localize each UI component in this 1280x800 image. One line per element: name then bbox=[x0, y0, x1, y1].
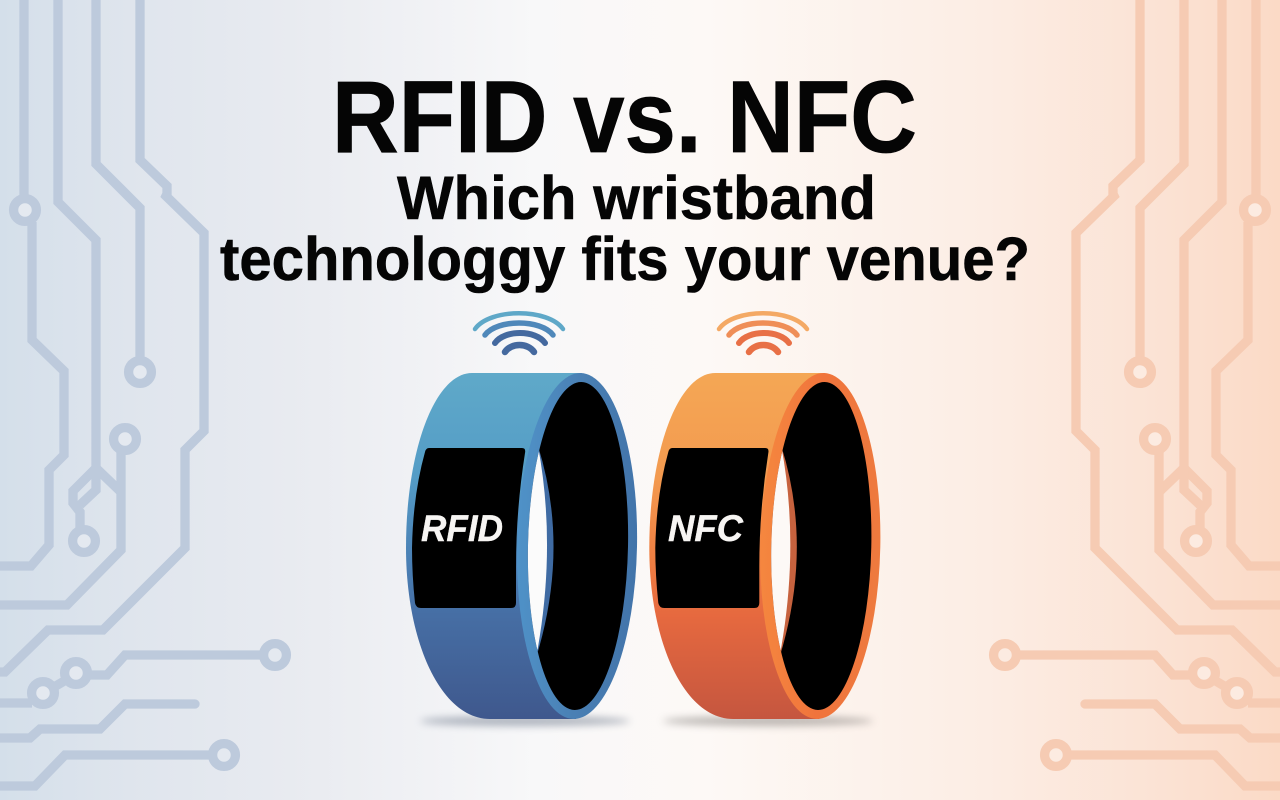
RFID band body bbox=[406, 373, 582, 719]
title: RFID vs. NFC bbox=[332, 60, 917, 174]
icon: NFC signal waves bbox=[719, 313, 807, 352]
RFID label: RFID bbox=[421, 508, 503, 549]
RFID black panel bbox=[412, 448, 525, 608]
right circuit pattern bbox=[994, 0, 1280, 786]
subtitle line two: technologgy fits your venue? bbox=[220, 225, 1030, 293]
subtitle line one: Which wristband bbox=[397, 164, 876, 232]
left circuit pattern bbox=[0, 0, 286, 786]
icon: RFID signal waves bbox=[475, 313, 563, 352]
NFC band rim bbox=[757, 372, 884, 720]
NFC inner lens bbox=[771, 450, 797, 652]
RFID band rim bbox=[513, 372, 641, 720]
NFC band shadow bbox=[663, 716, 873, 726]
RFID band shadow bbox=[420, 716, 630, 726]
RFID band opening bbox=[525, 381, 631, 711]
NFC label: NFC bbox=[668, 508, 744, 549]
NFC band opening bbox=[768, 381, 875, 711]
NFC wristband bbox=[649, 372, 884, 726]
NFC black panel bbox=[655, 448, 768, 608]
NFC band body bbox=[649, 373, 825, 719]
RFID wristband bbox=[406, 372, 641, 726]
RFID inner lens bbox=[528, 450, 554, 652]
